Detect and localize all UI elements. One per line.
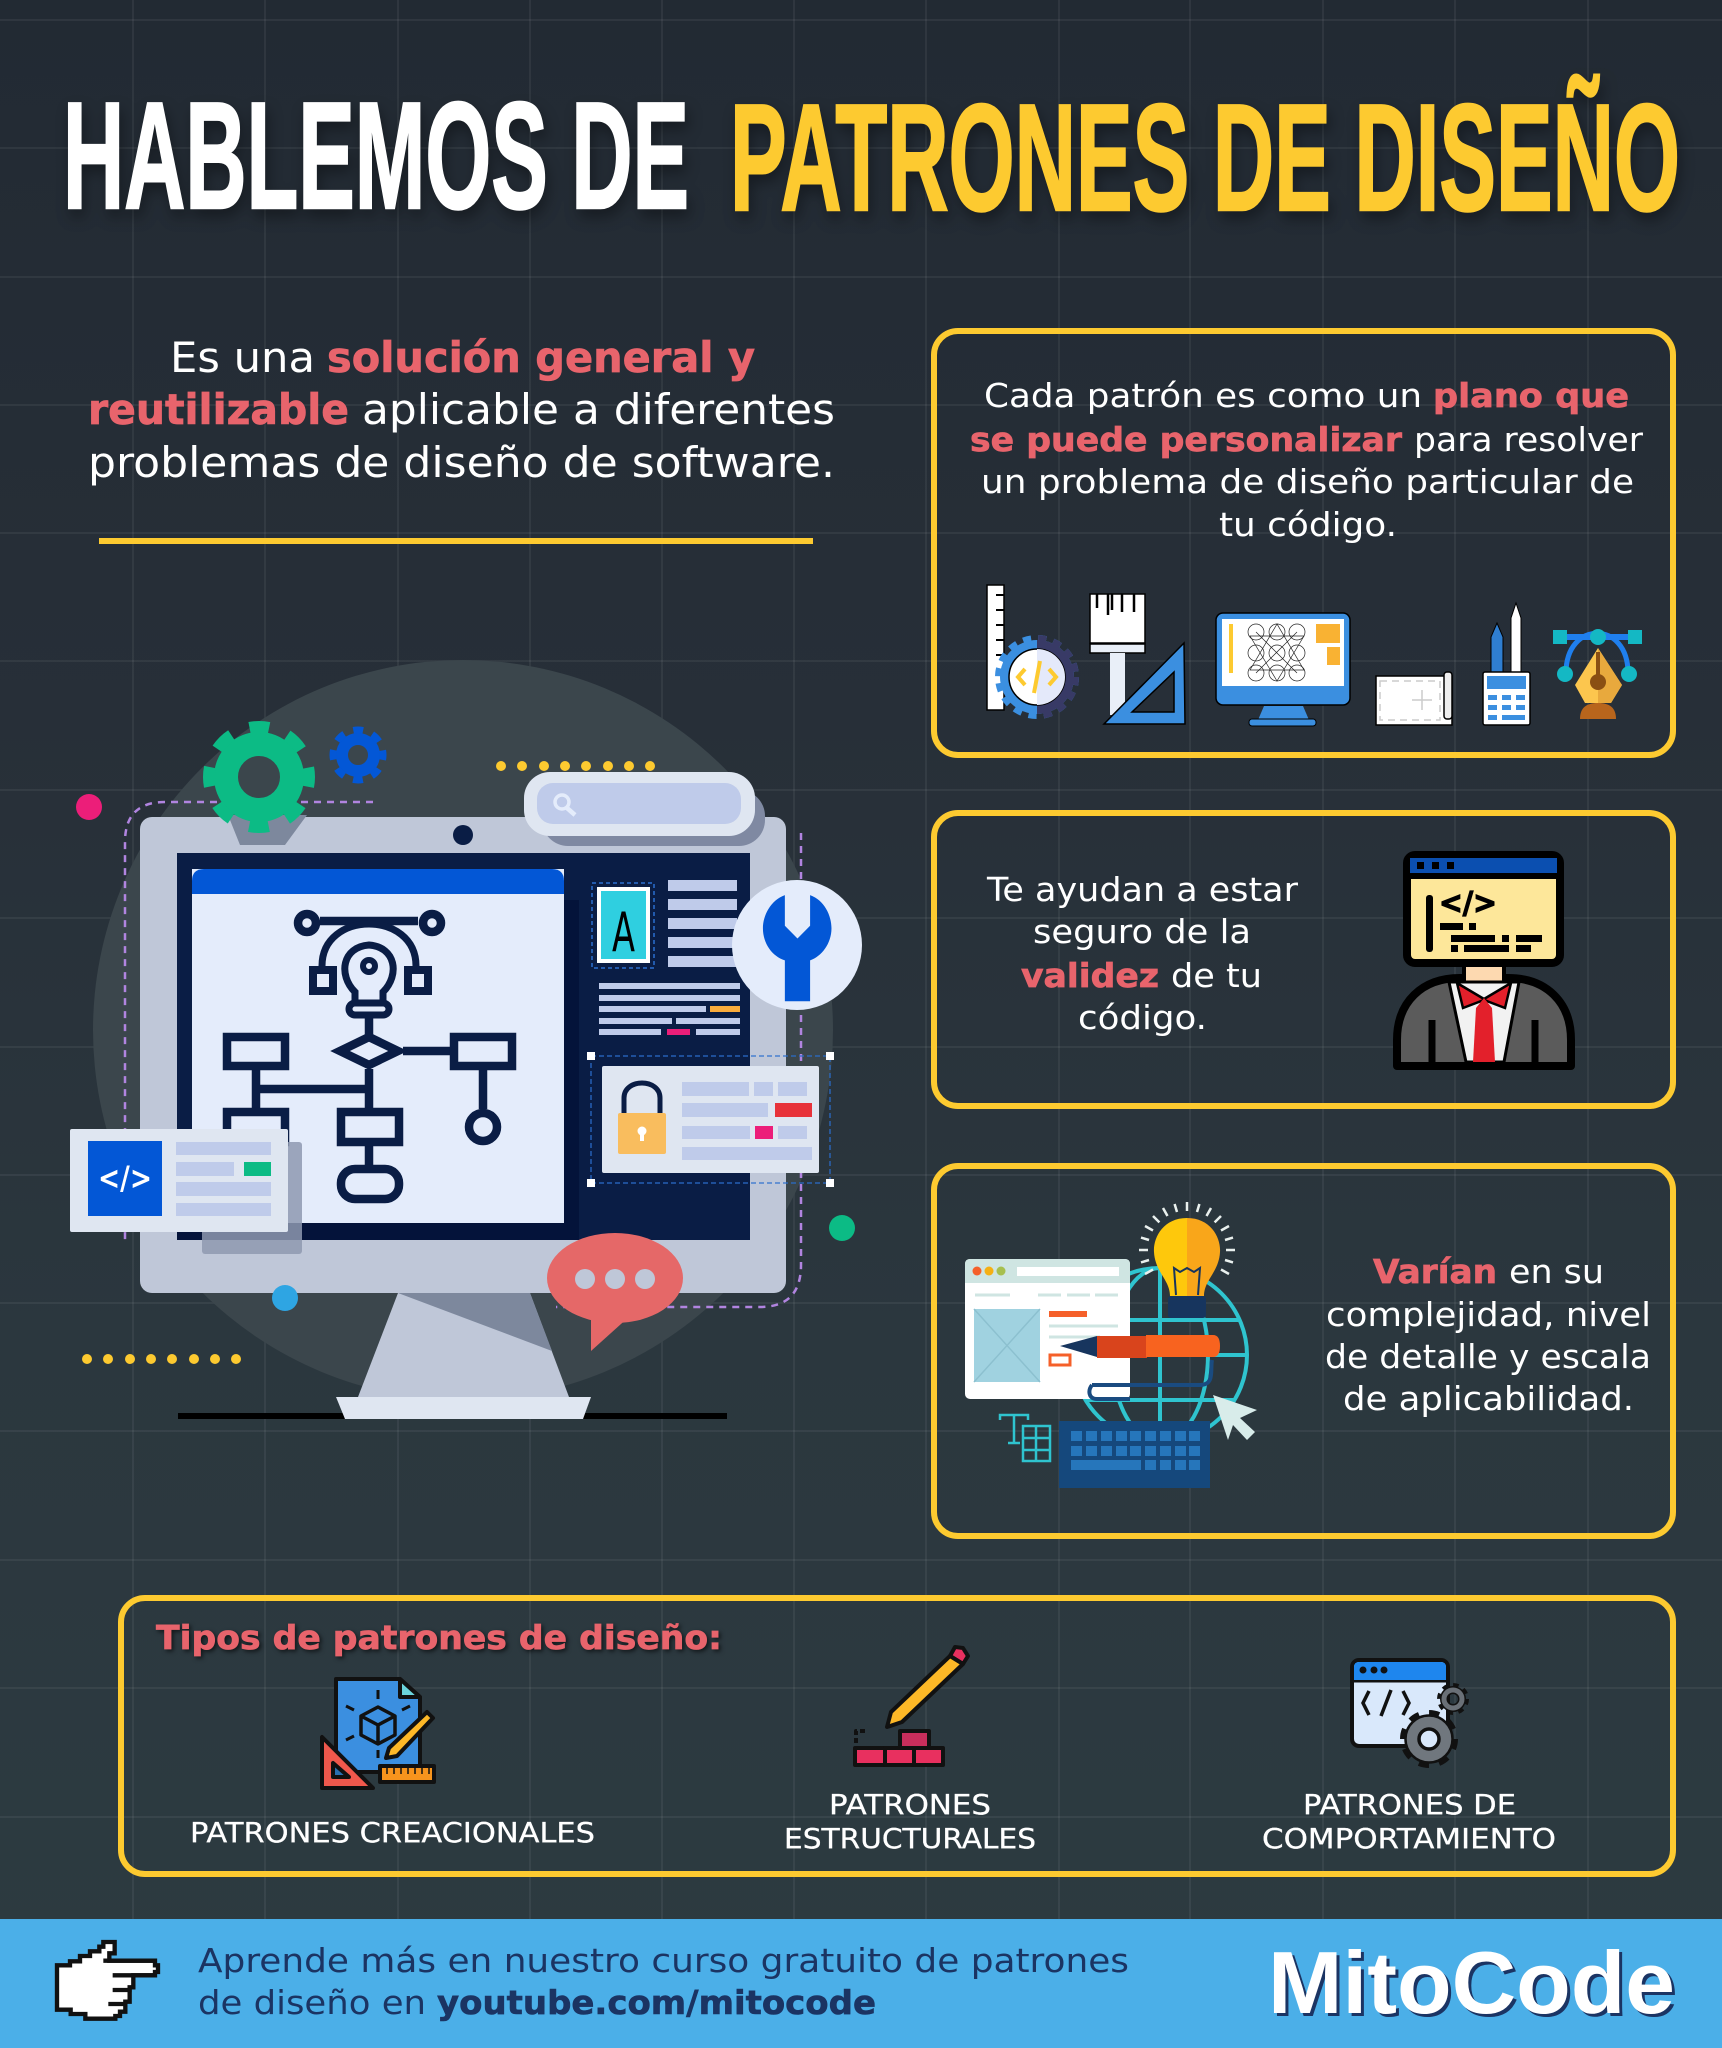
keyboard — [1059, 1421, 1210, 1488]
panel text: Varían — [1373, 1252, 1497, 1291]
panel text: de aplicabilidad. — [1343, 1379, 1634, 1418]
pen — [1060, 1335, 1220, 1399]
icon: wrench badge — [732, 880, 862, 1010]
footer text — [198, 1941, 1129, 2022]
icon: code window with gears — [1352, 1660, 1467, 1765]
panel text: se puede personalizar — [970, 420, 1403, 459]
footer text: Aprende más en nuestro curso gratuito de patrones — [198, 1941, 1129, 1980]
panel text: de tu — [1171, 956, 1262, 995]
browser window — [965, 1259, 1130, 1399]
type: estructurales: ESTRUCTURALES — [784, 1823, 1036, 1855]
lock card — [587, 1052, 834, 1199]
illustration: monitor with design tools — [70, 660, 862, 1419]
monitor stand — [178, 1293, 727, 1419]
icon: web design composition — [965, 1202, 1257, 1488]
panel: tipos de patrones — [121, 1598, 1673, 1874]
panel text — [970, 376, 1643, 544]
intro text: Es una — [170, 333, 315, 382]
type: comportamiento: COMPORTAMIENTO — [1262, 1823, 1556, 1855]
panel: complejidad y escala — [934, 1166, 1673, 1536]
poster and text lines: A — [612, 901, 635, 964]
chat bubble — [547, 1233, 683, 1351]
brand logo: MitoCode — [1268, 1933, 1675, 2032]
icon: green gear — [209, 727, 309, 845]
code card — [70, 1129, 302, 1254]
icon: brush and set square — [1090, 594, 1185, 724]
icon: monitor with pattern — [1216, 613, 1350, 726]
type and table glyph — [1000, 1415, 1050, 1461]
code card: </> — [98, 1159, 152, 1197]
design window — [192, 869, 564, 1223]
icon: pixel pointing hand — [57, 1942, 158, 2019]
intro text: reutilizable — [88, 385, 349, 434]
icon: search bar — [524, 772, 765, 846]
panel text: de detalle y escala — [1325, 1337, 1651, 1376]
intro text: aplicable a diferentes — [362, 385, 835, 434]
panel text: Cada patrón es como un — [984, 376, 1422, 415]
intro text — [88, 333, 835, 487]
decorative dots — [76, 761, 855, 1364]
icon: bezier pen — [1553, 629, 1642, 719]
icon: programmer with code head — [1397, 855, 1571, 1066]
panel text — [1325, 1252, 1651, 1418]
icon: blueprint — [1376, 672, 1452, 725]
panel text: un problema de diseño particular de — [981, 462, 1634, 501]
title: HABLEMOS DE — [63, 71, 689, 241]
icon: blueprint with set square — [322, 1679, 434, 1788]
type: creacionales — [190, 1679, 595, 1849]
icon: pencil and bricks — [855, 1647, 968, 1765]
intro text: solución general y — [327, 333, 755, 382]
panel text — [986, 870, 1298, 1037]
type: estructurales: PATRONES — [829, 1789, 991, 1821]
panel heading: Tipos de patrones de diseño: — [156, 1618, 722, 1657]
panel text: seguro de la — [1033, 912, 1251, 951]
panel text: en su — [1509, 1252, 1604, 1291]
panel text: plano que — [1433, 376, 1629, 415]
poster and text lines — [592, 880, 740, 1035]
icon: ruler and code gear — [987, 585, 1075, 715]
type: estructurales — [784, 1647, 1036, 1855]
intro text: problemas de diseño de software. — [88, 438, 835, 487]
type: comportamiento: PATRONES DE — [1303, 1789, 1516, 1821]
icon: blue gear — [333, 730, 383, 780]
icon: calculator and pencils — [1483, 603, 1530, 725]
panel text: Te ayudan a estar — [986, 870, 1298, 909]
panel text: validez — [1021, 956, 1159, 995]
footer text: youtube.com/mitocode — [437, 1983, 876, 2022]
monitor body — [140, 817, 786, 1293]
footer banner — [0, 1919, 1722, 2048]
flowchart with bulb — [227, 914, 512, 1199]
panel text: tu código. — [1219, 505, 1397, 544]
footer text: de diseño en — [198, 1983, 426, 2022]
panel text: código. — [1078, 998, 1207, 1037]
panel text: complejidad, nivel — [1326, 1295, 1651, 1334]
title — [63, 71, 1680, 243]
light bulb — [1139, 1202, 1235, 1318]
icon: programmer with code head: </> — [1439, 886, 1497, 921]
type: comportamiento — [1262, 1660, 1556, 1855]
cursor — [1213, 1395, 1257, 1440]
panel text: para resolver — [1414, 420, 1643, 459]
panel: validez del codigo — [934, 813, 1673, 1106]
panel: plano personalizable — [934, 331, 1673, 755]
type: creacionales: PATRONES CREACIONALES — [190, 1817, 595, 1849]
